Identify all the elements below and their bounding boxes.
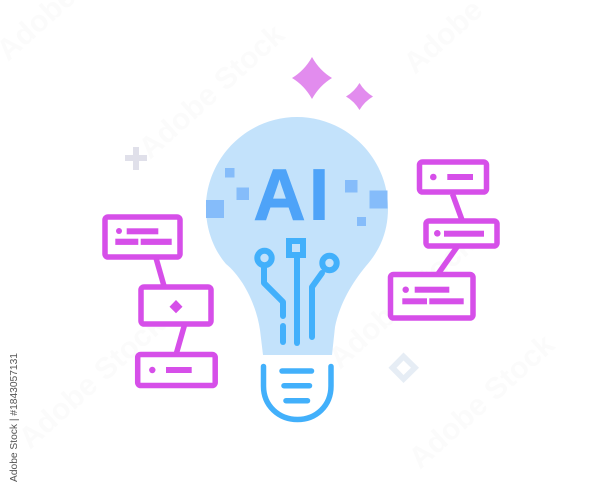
lightbulb bbox=[206, 117, 388, 420]
connectors bbox=[438, 194, 462, 274]
top box bbox=[105, 217, 180, 257]
top box bbox=[420, 162, 486, 192]
icon: plus bbox=[125, 147, 147, 170]
bulb glass bbox=[206, 117, 388, 355]
stock watermark: Adobe Stock bbox=[133, 18, 291, 165]
connectors bbox=[156, 258, 184, 353]
stock id label: Adobe Stock | #1843057131 bbox=[9, 353, 20, 482]
stock watermark: Adobe Stock bbox=[323, 228, 481, 375]
bottom box bbox=[138, 354, 215, 386]
panel: left flowchart bbox=[105, 217, 215, 386]
middle box bbox=[426, 221, 497, 246]
bottom box bbox=[390, 274, 473, 318]
icon: large sparkle bbox=[292, 57, 332, 99]
bulb base bbox=[264, 366, 331, 420]
icon: small sparkle bbox=[346, 83, 373, 110]
circuit traces bbox=[257, 241, 337, 343]
stock watermark: Adobe Stock bbox=[13, 308, 171, 455]
AI text: AI bbox=[254, 156, 329, 236]
middle box bbox=[141, 287, 211, 324]
icon: hollow diamond bbox=[388, 352, 419, 383]
stock watermark: Adobe Stock bbox=[403, 328, 561, 475]
pixel squares bbox=[206, 168, 388, 226]
panel: right flowchart bbox=[390, 162, 497, 318]
